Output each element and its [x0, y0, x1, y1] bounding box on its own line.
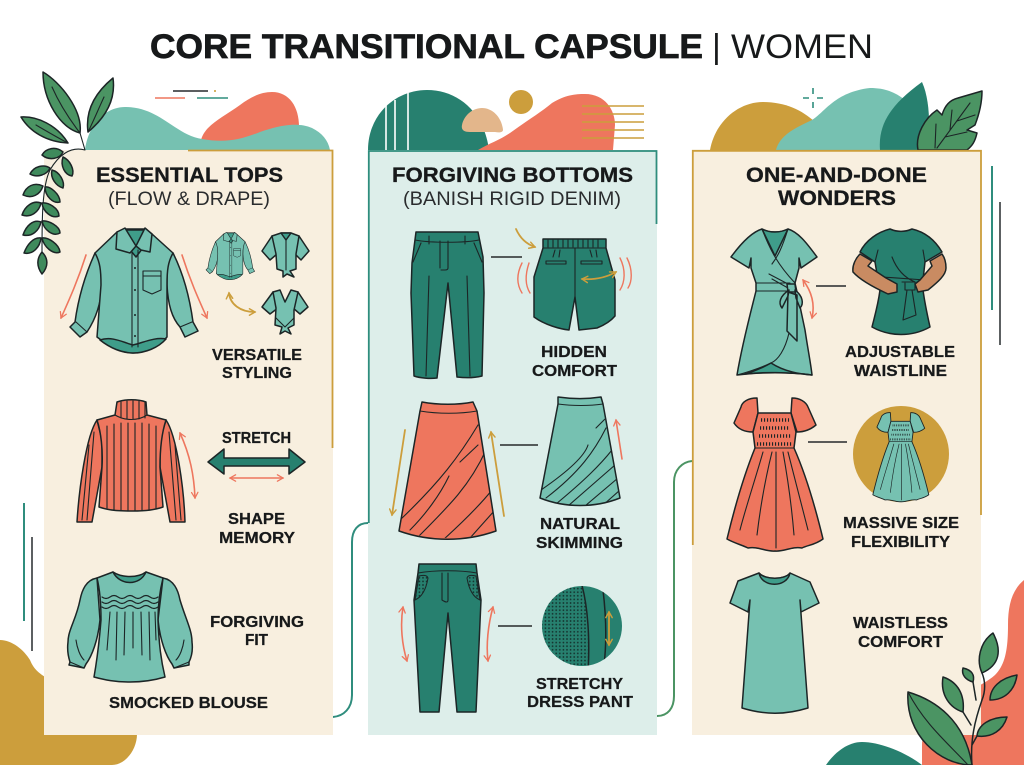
- icon: motion arcs: [518, 258, 631, 293]
- arrow: gold down: [392, 430, 405, 515]
- icon: small shirt: [206, 232, 255, 280]
- background decoration: gold blob bottom left: [0, 640, 137, 765]
- label: adjustable waistline: ADJUSTABLE: [845, 344, 955, 361]
- decorative lines left: [23, 503, 25, 621]
- connector teal: [333, 523, 368, 717]
- icon: smocked blouse: [68, 572, 192, 682]
- label: hidden comfort: [532, 344, 617, 380]
- label: natural skimming: [536, 516, 623, 552]
- icon: smocked coral dress: [727, 398, 823, 551]
- icon: leaves top left: [21, 72, 113, 274]
- decorative line right dark: [999, 202, 1001, 345]
- icon: t-shirt dress: [730, 573, 819, 713]
- arrow: coral right: [487, 607, 493, 661]
- icon: v-neck knot top: [262, 290, 308, 334]
- title: |: [712, 28, 721, 66]
- heading: essential tops: ESSENTIAL TOPS: [96, 164, 283, 187]
- icon: ribbed turtleneck: [77, 400, 185, 522]
- label: versatile styling: STYLING: [222, 365, 292, 382]
- panel 2 card: [368, 150, 657, 735]
- label: hidden comfort: HIDDEN: [541, 344, 607, 361]
- icon: stretchy pants: [414, 564, 481, 712]
- label: smocked blouse: SMOCKED BLOUSE: [109, 695, 268, 712]
- panel 3 gold border: [693, 151, 981, 545]
- label: stretch: STRETCH: [222, 430, 291, 447]
- icon: dress with adjusting hands: [853, 229, 946, 334]
- arrow: drape left: [61, 255, 86, 318]
- panel 1 card: [44, 150, 333, 735]
- label: shape memory: MEMORY: [219, 530, 295, 547]
- connector line: [816, 285, 846, 287]
- connector line: [491, 256, 522, 258]
- connector line: [500, 444, 538, 446]
- label: massive size flexibility: [843, 515, 959, 551]
- label: adjustable waistline: WAISTLINE: [854, 363, 947, 380]
- arrow: coral waist: [803, 280, 813, 318]
- heading: one-and-done wonders: WONDERS: [778, 187, 896, 210]
- arrow: coral left: [402, 607, 407, 661]
- icon: fabric detail circle: [542, 586, 622, 666]
- panel 3 top decoration: [710, 82, 982, 150]
- label: waistless comfort: COMFORT: [858, 634, 943, 651]
- panel 1 top decoration: [85, 91, 330, 150]
- label: adjustable waistline: [845, 344, 955, 380]
- label: natural skimming: SKIMMING: [536, 535, 623, 552]
- label: shape memory: SHAPE: [228, 511, 285, 528]
- arrow: stretch double: [208, 449, 305, 474]
- arrow: gold waist: [516, 229, 535, 247]
- label: waistless comfort: WAISTLESS: [853, 615, 948, 632]
- label: stretchy dress pant: DRESS PANT: [527, 694, 633, 711]
- title: WOMEN: [731, 28, 873, 66]
- panel 2 teal border: [369, 151, 656, 523]
- arrow: hip stretch gold: [582, 272, 616, 279]
- subheading: banish rigid denim: (BANISH RIGID DENIM): [403, 189, 621, 210]
- arrow: styling swap: [229, 293, 255, 312]
- arrow: stretch curved: [180, 433, 195, 498]
- icon: elastic back trousers: [534, 239, 615, 330]
- label: stretchy dress pant: STRETCHY: [536, 676, 623, 693]
- arrow: coral up: [616, 420, 622, 459]
- heading: one-and-done wonders: ONE-AND-DONE: [746, 164, 927, 187]
- label: forgiving fit: FORGIVING: [210, 614, 304, 631]
- panel 3 card: [692, 150, 981, 735]
- background decoration: teal blob bottom: [826, 742, 922, 765]
- decorative line right teal: [991, 166, 993, 310]
- label: massive size flexibility: FLEXIBILITY: [851, 534, 950, 551]
- icon: tied top: [262, 233, 309, 277]
- icon: leaves bottom right: [908, 633, 1017, 765]
- label: waistless comfort: [853, 615, 948, 651]
- label: forgiving fit: [210, 614, 304, 649]
- panel 1 gold border: [188, 150, 332, 448]
- label: massive size flexibility: MASSIVE SIZE: [843, 515, 959, 532]
- icon: gold circle with teal dress: [853, 406, 949, 502]
- label: versatile styling: [212, 347, 302, 382]
- icon: coral bias skirt: [399, 402, 496, 540]
- label: stretchy dress pant: [527, 676, 633, 711]
- arrow: drape right: [182, 255, 207, 318]
- connector line: [808, 441, 847, 443]
- icon: wrap dress: [731, 229, 817, 375]
- arrow: stretch small: [230, 477, 283, 479]
- connector green: [657, 461, 692, 716]
- icon: teal bias skirt: [540, 397, 620, 506]
- panel: essential tops: [21, 72, 333, 735]
- background decoration: coral blob bottom right: [922, 580, 1024, 765]
- arrow: gold up: [491, 432, 504, 516]
- decorative line left dark: [31, 537, 33, 651]
- label: shape memory: [219, 511, 295, 547]
- panel: one-and-done wonders: [692, 82, 982, 735]
- icon: tailored trousers: [411, 232, 484, 378]
- arrow: gold vertical: [608, 612, 610, 645]
- connector line: [498, 625, 532, 627]
- panel: forgiving bottoms: [368, 90, 657, 735]
- label: hidden comfort: COMFORT: [532, 363, 617, 380]
- label: versatile styling: VERSATILE: [212, 347, 302, 364]
- subheading: flow and drape: (FLOW & DRAPE): [108, 189, 270, 210]
- heading: forgiving bottoms: FORGIVING BOTTOMS: [392, 164, 633, 187]
- label: natural skimming: NATURAL: [540, 516, 620, 533]
- panel 2 top decoration: [368, 90, 644, 150]
- heading: one-and-done wonders: [746, 164, 927, 210]
- label: forgiving fit: FIT: [245, 632, 268, 649]
- icon: button-up shirt: [70, 228, 198, 353]
- title: CORE TRANSITIONAL CAPSULE: [150, 28, 703, 66]
